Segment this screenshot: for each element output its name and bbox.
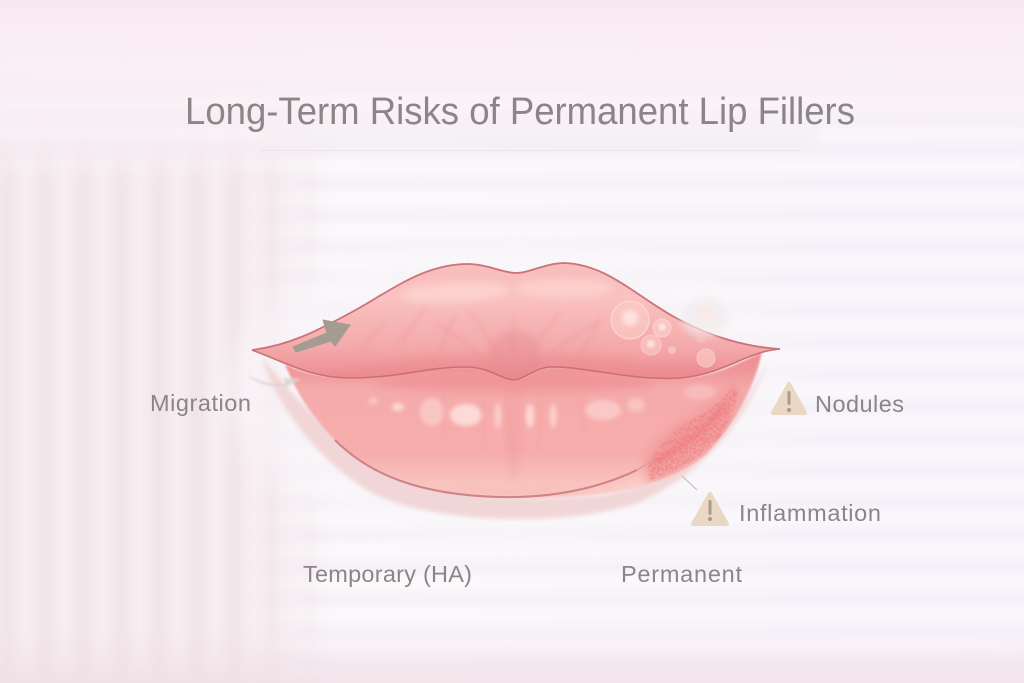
lower lip [285, 352, 762, 510]
arrow: faint migration [247, 374, 301, 388]
glossy highlights [368, 384, 716, 429]
inflammation leader line [682, 476, 697, 490]
inflammation patch [643, 380, 741, 484]
title: Long-Term Risks of Permanent Lip Fillers [185, 91, 855, 133]
label: migration: Migration [150, 390, 251, 416]
label: inflammation: Inflammation [739, 500, 881, 526]
upper lip outline [252, 263, 780, 350]
nodules [611, 297, 729, 367]
mouth line [252, 349, 780, 380]
label: permanent: Permanent [621, 561, 742, 587]
arrow: upper lip migration [293, 320, 350, 352]
label: temporary: Temporary (HA) [303, 561, 472, 587]
icon: warning nodules [773, 384, 805, 413]
illustration: lips [150, 263, 904, 587]
icon: warning inflammation [693, 494, 727, 524]
label: nodules: Nodules [815, 391, 904, 417]
lower lip soft shadow [262, 358, 768, 519]
upper lip [252, 263, 780, 390]
lower lip contour [335, 440, 637, 497]
